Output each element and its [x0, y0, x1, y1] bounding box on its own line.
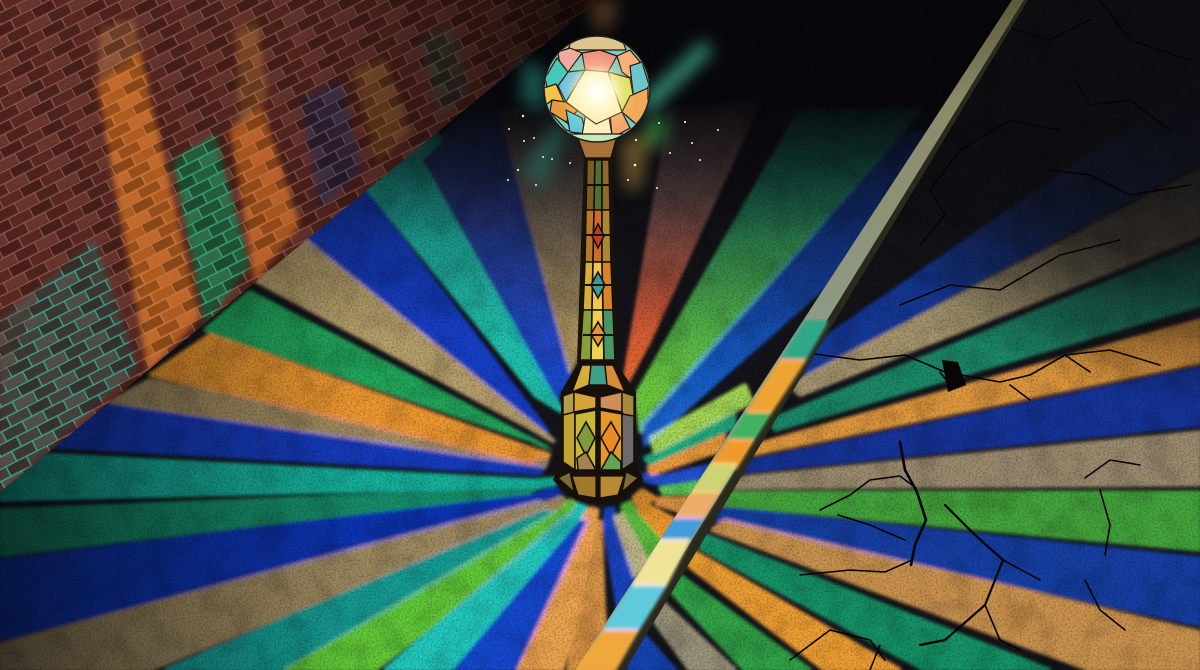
- base shoulder panes: [563, 365, 634, 430]
- globe neck: [576, 133, 618, 158]
- wall coloured light bands: [0, 20, 470, 492]
- crack hole: [942, 360, 966, 392]
- column body: [577, 155, 618, 362]
- wall shading: [0, 0, 600, 500]
- curb: [575, 0, 1028, 670]
- teal mortar glow: [0, 240, 138, 492]
- base diamond panes: [563, 410, 634, 470]
- column glass panes: [580, 160, 615, 360]
- globe bright centre: [557, 52, 637, 132]
- lamp column: [577, 155, 618, 362]
- near ground left falloff: [0, 227, 338, 670]
- far corner shading: [923, 78, 1200, 388]
- scattered light sparkles: [507, 115, 719, 189]
- ground cracks: [790, 0, 1190, 670]
- brick courses: [0, 0, 600, 500]
- lamp globe: [544, 33, 650, 158]
- curb coloured reflections: [575, 322, 826, 670]
- lamp base: [553, 360, 643, 505]
- globe glass tiles: [544, 33, 649, 145]
- globe frame: [544, 36, 650, 142]
- curb side face: [612, 0, 1028, 670]
- column cross bars: [583, 185, 614, 335]
- glow haze behind lamp: [520, 0, 712, 190]
- light rays on the cracked far ground: [625, 0, 1200, 670]
- far ground shading: [877, 81, 1200, 308]
- curb lit top face: [575, 0, 1024, 670]
- base foot panes: [558, 472, 638, 498]
- green mortar glow: [173, 135, 250, 325]
- base outline: [553, 360, 643, 505]
- brick wall: [0, 0, 600, 500]
- wall base colour: [0, 0, 600, 500]
- near ground top falloff: [231, 0, 1012, 318]
